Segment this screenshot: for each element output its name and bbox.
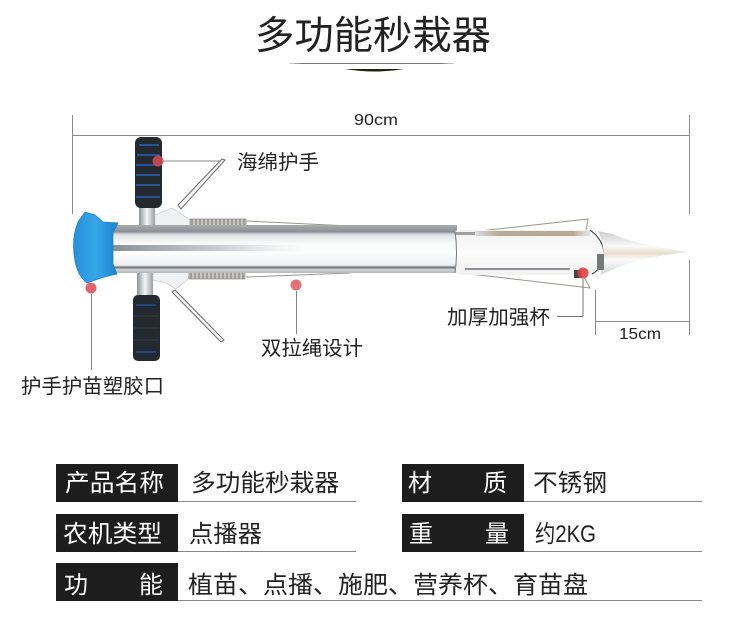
dimension: cone length 15cm — [596, 260, 690, 343]
clip — [597, 254, 604, 270]
springs — [189, 219, 246, 279]
spec row: functions — [56, 563, 702, 601]
spec row: material — [402, 464, 702, 502]
callout: plastic mouth — [21, 282, 164, 398]
top stem — [139, 205, 155, 228]
spec row: material: 材 — [408, 470, 432, 497]
callout: reinforced cup — [447, 268, 588, 329]
rear tube — [112, 225, 457, 273]
bottom foam handle — [133, 295, 160, 361]
spec row: machine type — [56, 514, 356, 552]
spec row: machine type: 点播器 — [189, 521, 262, 548]
callout: foam handle — [152, 151, 319, 174]
spec row: material: 不锈钢 — [533, 470, 607, 497]
callout: reinforced cup: 加厚加强杯 — [447, 306, 550, 329]
spec row: weight — [402, 514, 702, 552]
cone tip — [598, 231, 687, 275]
callout: double pull cord — [261, 280, 363, 360]
spec row: functions: 能 — [139, 572, 163, 599]
pull cords — [246, 219, 590, 288]
blue mouth — [74, 212, 118, 283]
spec row: machine type: 农机类型 — [63, 521, 162, 548]
bottom stem — [137, 270, 153, 297]
callout: foam handle: 海绵护手 — [237, 151, 319, 174]
spec row: weight: 重 — [409, 521, 433, 548]
spec row: functions: 功 — [64, 572, 88, 599]
spec row: weight: 量 — [485, 521, 509, 548]
callout: double pull cord: 双拉绳设计 — [261, 337, 363, 360]
spec row: product name — [56, 464, 356, 502]
product: seedling planter — [74, 137, 687, 361]
spec row: weight: 约2KG — [535, 521, 596, 548]
dimension: cone length 15cm: 15cm — [619, 326, 661, 343]
spec row: product name: 产品名称 — [65, 470, 164, 497]
title underline ornament — [289, 63, 454, 72]
top bracket and lever — [155, 159, 225, 226]
top foam handle — [135, 137, 162, 208]
spec row: product name: 多功能秒栽器 — [191, 470, 339, 497]
dimension: total length 90cm — [72, 112, 690, 214]
bottom bracket and lever — [153, 272, 224, 342]
spec row: material: 质 — [483, 470, 507, 497]
front cup — [455, 230, 604, 275]
callout: plastic mouth: 护手护苗塑胶口 — [21, 375, 164, 398]
dimension: total length 90cm: 90cm — [354, 112, 398, 129]
title: 多功能秒栽器 — [255, 15, 491, 58]
spec row: functions: 植苗、点播、施肥、营养杯、育苗盘 — [188, 572, 588, 599]
